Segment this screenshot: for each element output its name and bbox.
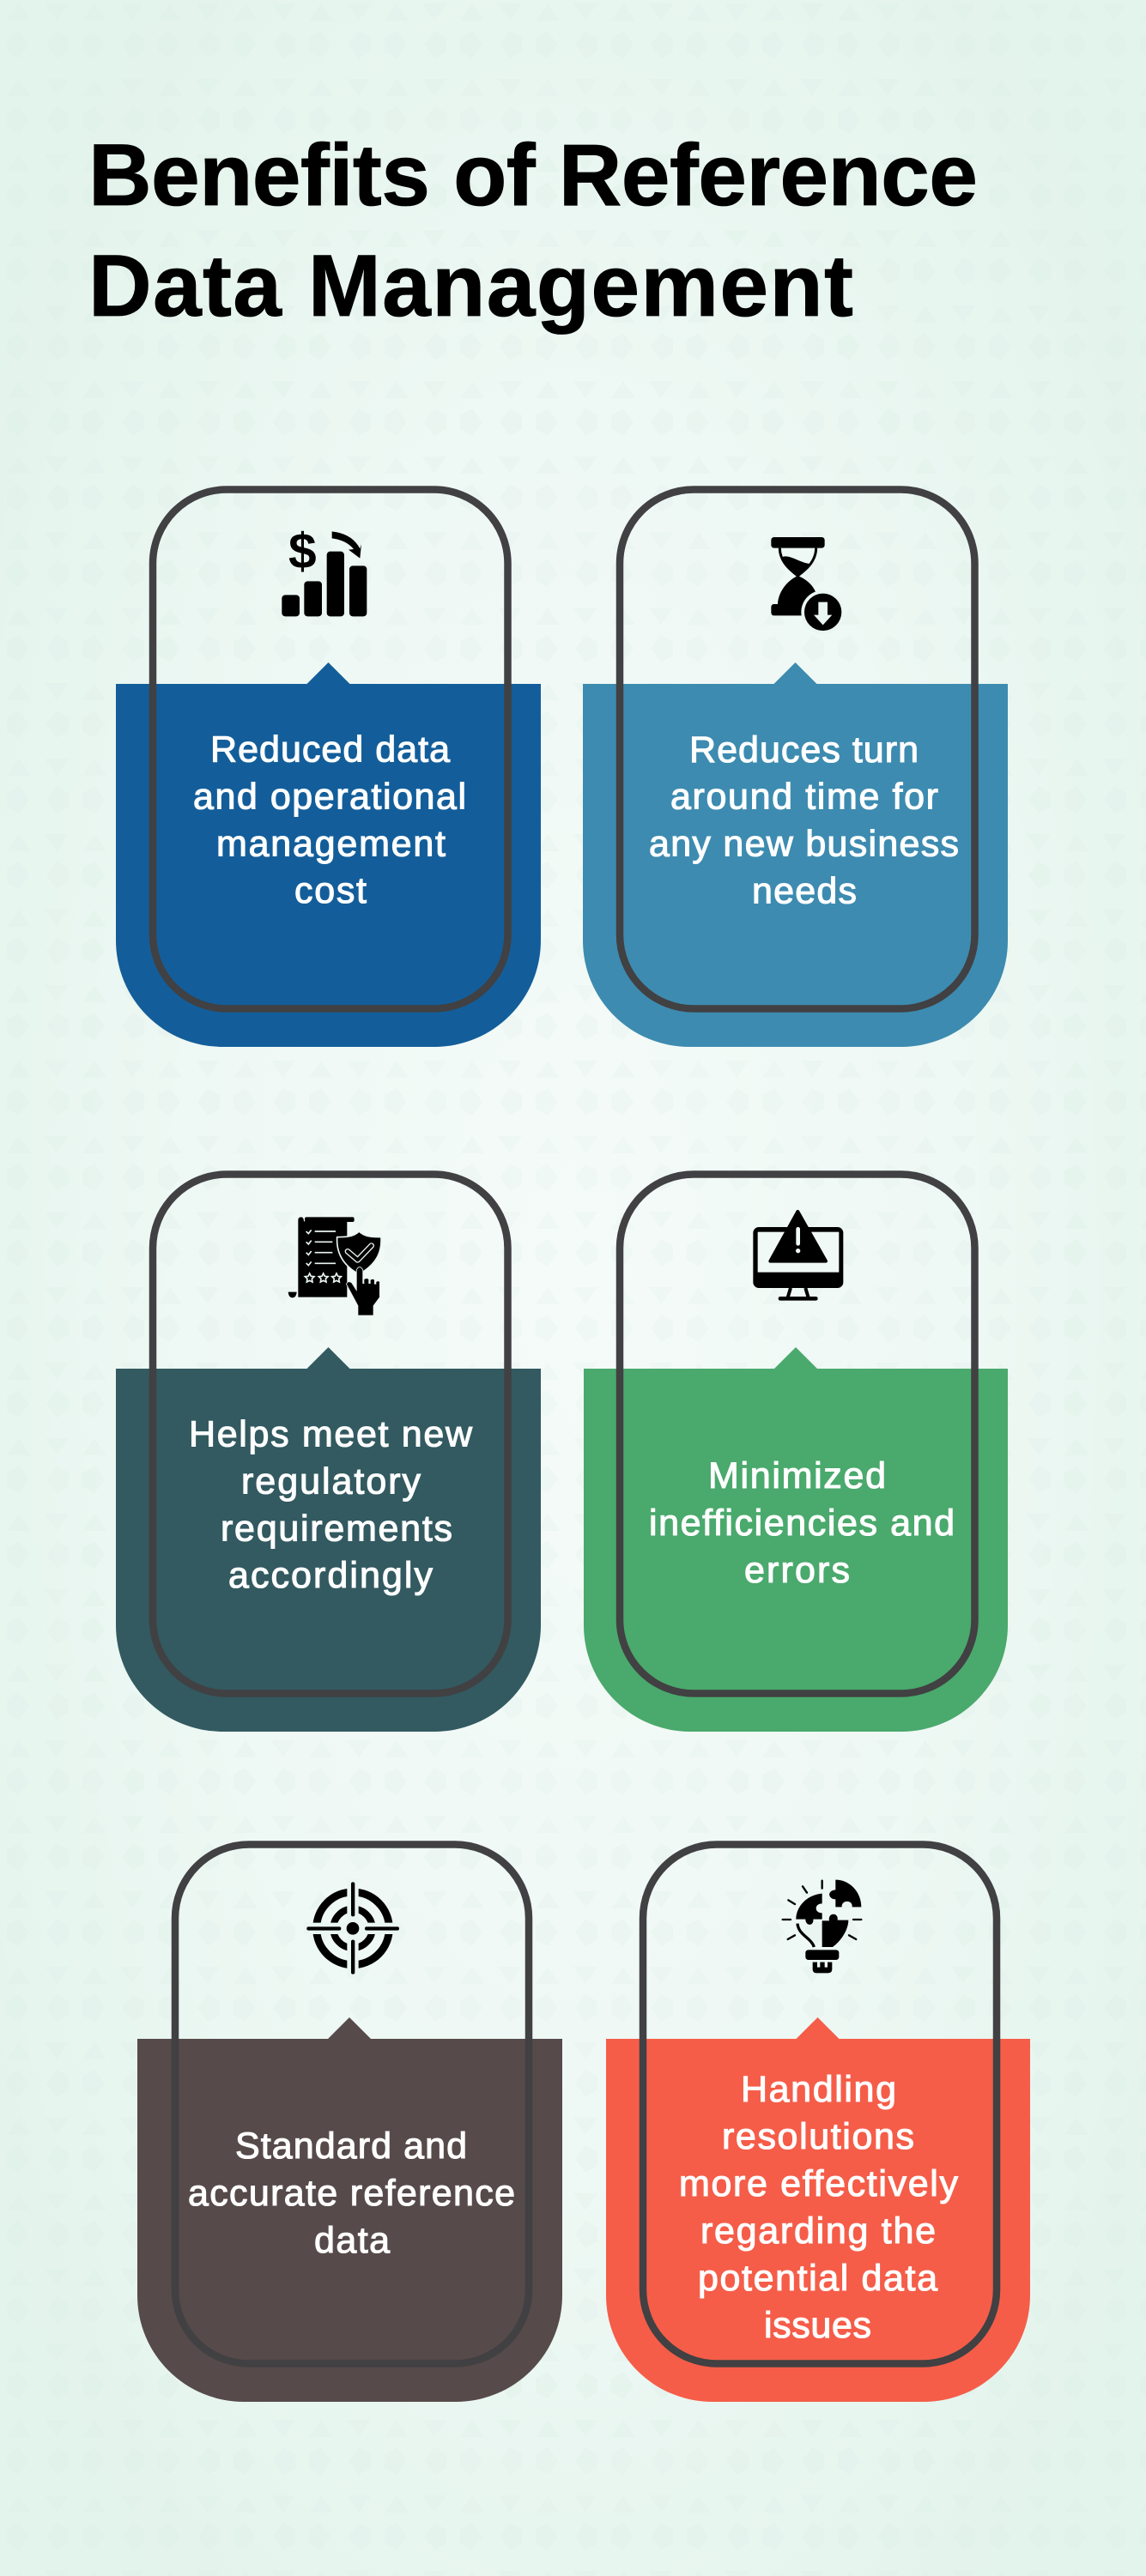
panel: coral [606,2017,1030,2402]
title: Data Management [88,237,853,335]
outline frame [175,1845,529,2363]
panel: blue [116,662,541,1047]
panel: brown [137,2017,562,2402]
text [189,1414,473,1596]
text [649,1455,955,1591]
icon: document, shield and hand [288,1217,381,1315]
text: resolutions [722,2116,914,2157]
text: requirements [221,1509,452,1550]
text [649,729,959,911]
panel: dark teal [116,1347,541,1732]
card: minimized errors [584,1174,1008,1732]
panel: green [584,1347,1008,1732]
text: Standard and [235,2126,467,2167]
text: potential data [698,2258,937,2299]
card: reduced cost [116,489,541,1047]
card: turnaround time [583,489,1008,1047]
text: any new business [649,824,959,865]
text [193,729,466,911]
card: regulatory requirements [116,1174,541,1732]
text: errors [744,1550,850,1591]
outline frame [153,489,508,1009]
text: Minimized [708,1455,886,1497]
text: more effectively [679,2163,958,2204]
icon: dollar and falling bars: $ [288,523,317,579]
text: Reduces turn [689,729,919,771]
title: Benefits of Reference [88,126,978,224]
title [88,126,978,335]
text: around time for [670,777,938,818]
text [188,2126,515,2261]
text: and operational [193,776,466,817]
text: Handling [741,2069,896,2110]
icon: dollar and falling bars [282,523,367,616]
text: regarding the [700,2210,936,2252]
text: needs [752,870,857,911]
icon: puzzle light bulb [783,1880,861,1973]
outline frame [153,1174,508,1694]
icon: hourglass with down arrow [771,537,845,634]
outline frame [620,489,975,1009]
panel: teal blue [583,662,1008,1047]
text [679,2069,958,2346]
icon: target crosshair [304,1879,403,1978]
card: accurate reference data [137,1845,562,2402]
text: Reduced data [210,729,450,771]
text: regulatory [241,1460,421,1502]
outline frame [643,1845,997,2363]
text: accordingly [228,1555,433,1596]
text: Helps meet new [189,1414,473,1455]
text: management [216,824,446,865]
text: issues [764,2305,871,2346]
outline frame [620,1174,975,1694]
card: handling resolutions [606,1845,1030,2402]
text: accurate reference [188,2173,515,2214]
text: data [314,2220,390,2261]
icon: monitor with warning triangle [753,1212,843,1301]
text: cost [294,870,367,911]
text: inefficiencies and [649,1503,955,1544]
